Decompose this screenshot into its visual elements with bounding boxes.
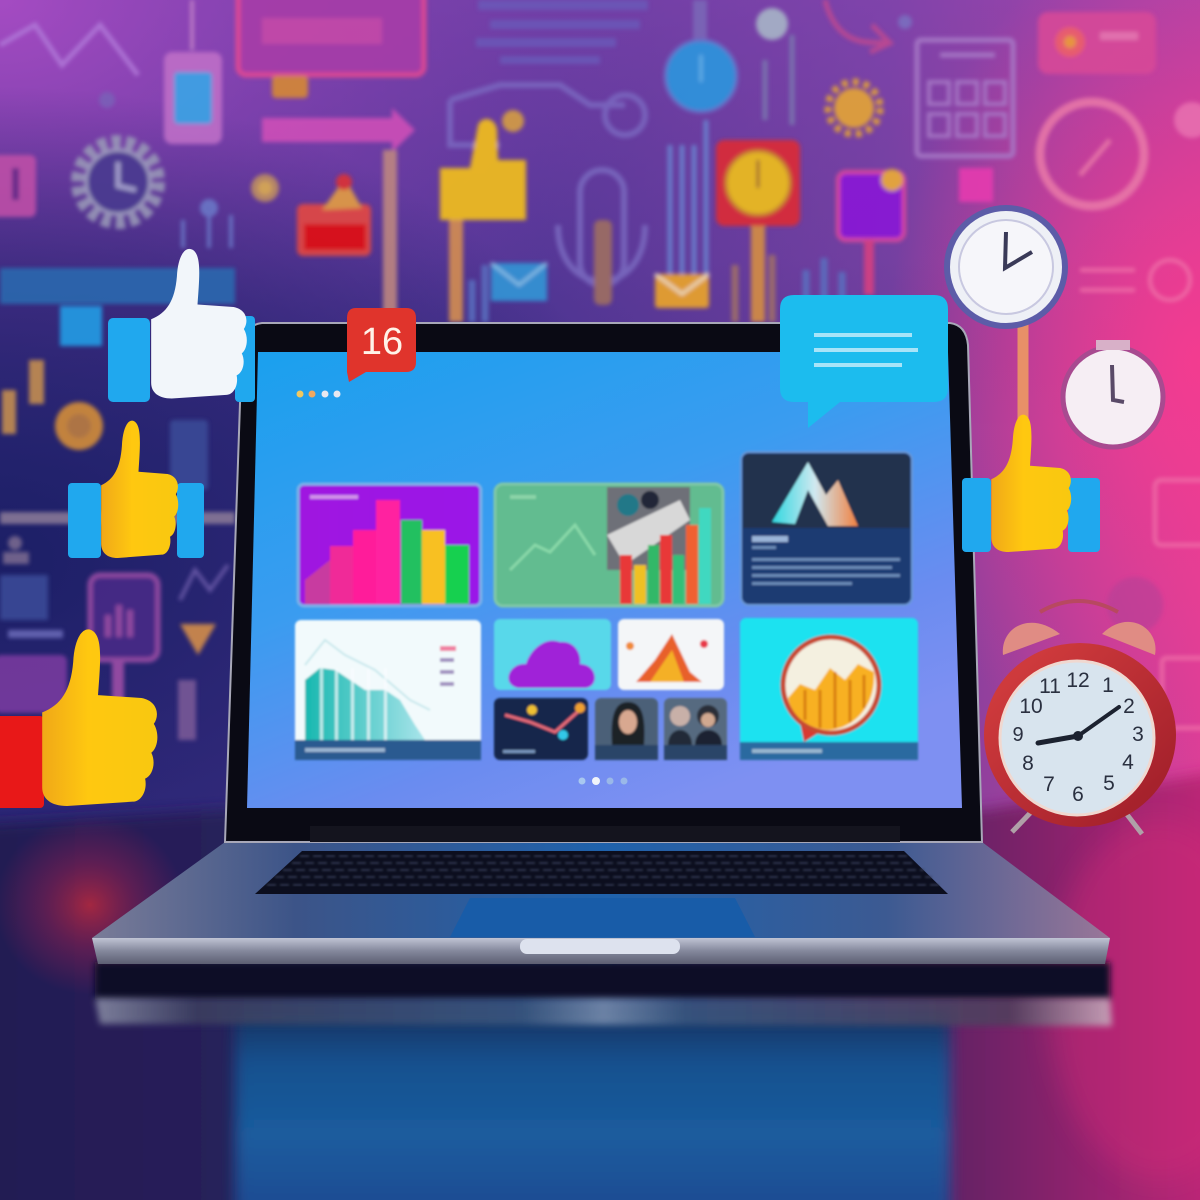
icon: curved arrow (825, 0, 890, 52)
clock numerals: 3 (1132, 723, 1144, 746)
icon: pink square (959, 168, 993, 202)
clock numerals: 8 (1022, 752, 1034, 775)
table surface with reflection (0, 770, 1200, 1200)
notification badge: 16 (361, 321, 403, 363)
alarm clock (984, 601, 1176, 834)
icon: microphone outline (558, 170, 645, 285)
background tech icons (0, 0, 1200, 740)
icon: calendar grid (917, 40, 1013, 156)
keyboard (255, 851, 948, 894)
pagination dots (578, 777, 628, 785)
icon: clipboard chart (90, 575, 158, 705)
icon: circuit block (476, 0, 648, 64)
clock numerals (1012, 669, 1144, 806)
icon: left panel shapes (0, 420, 208, 740)
clock bells (1003, 601, 1156, 655)
icon: red tray (297, 174, 371, 256)
icon: sun gear (828, 82, 880, 134)
clock numerals: 2 (1123, 695, 1135, 718)
clock numerals: 9 (1012, 724, 1024, 746)
thumbs up: gold lower left with red cuff (0, 629, 157, 808)
clock numerals: 5 (1103, 772, 1115, 795)
icon: left pink label (0, 655, 67, 713)
background wall gradient (0, 0, 1200, 860)
laptop (92, 323, 1110, 964)
icon: small dots (99, 92, 279, 202)
thumbs up: gold upper (68, 421, 204, 558)
clock numerals: 7 (1043, 773, 1055, 796)
clock numerals: 10 (1019, 695, 1043, 718)
laptop lid (225, 323, 982, 842)
chat bubble (780, 295, 948, 428)
icon: left small bars (2, 360, 44, 434)
icon: satellite dish (756, 8, 792, 125)
icon: left blue bar (0, 268, 235, 346)
icon: orange dial (55, 402, 103, 450)
screen (247, 352, 962, 808)
wall clock one (947, 208, 1065, 420)
card: two people (664, 698, 727, 760)
icon: faint chart line (180, 565, 228, 600)
icon: mountain logo (772, 462, 858, 526)
thumbs up: white (108, 249, 255, 402)
card: green line chart with photo (495, 484, 723, 606)
icon: left horizontal rail (0, 512, 235, 524)
clock case (984, 643, 1176, 827)
laptop reflection lip (95, 998, 1112, 1026)
notification badge (347, 308, 416, 382)
icon: key circuit (450, 85, 645, 145)
card: mountain chart (618, 619, 724, 690)
icon: right faint panels (1080, 260, 1200, 728)
icon: vertical lines (670, 120, 706, 275)
icon: pink monitor (238, 0, 424, 98)
icon: phone tag (164, 0, 222, 144)
clock numerals: 12 (1066, 669, 1090, 692)
icon: zigzag line (0, 25, 138, 75)
card: portrait (595, 698, 658, 760)
icon: stem line (383, 150, 397, 322)
clock numerals: 6 (1072, 783, 1084, 806)
icon: keyhole tag (0, 155, 36, 217)
card: route map (494, 698, 588, 760)
icon: top right card (1038, 12, 1156, 74)
icon: gear clock (78, 142, 158, 222)
thumbs up: gold right (962, 415, 1100, 552)
trackpad (450, 898, 755, 937)
icon: orange triangle (180, 624, 216, 655)
lid notch (520, 939, 680, 954)
icon: purple app square (838, 169, 904, 295)
icon: yellow thumbs up sign (440, 119, 526, 322)
icon: envelopes (491, 263, 709, 308)
hinge (310, 826, 900, 842)
icon: yellow clock sign (716, 140, 800, 322)
card: purple cloud (494, 619, 611, 690)
clock numerals: 1 (1102, 674, 1114, 697)
clock legs (1012, 808, 1142, 834)
icon: large pink dial (1040, 102, 1144, 206)
icon: person (3, 536, 29, 564)
card: dark logo panel (741, 452, 912, 605)
window dots (296, 390, 340, 398)
icon: chart bubble (783, 637, 879, 742)
wall clock two (1063, 340, 1163, 447)
icon: pink arrow (262, 108, 415, 152)
icon: blue dial pendant (665, 0, 737, 112)
card: purple bar chart (298, 484, 481, 606)
clock numerals: 11 (1039, 675, 1061, 698)
card: white teal chart (295, 620, 481, 760)
card: cyan circular chart (740, 618, 918, 760)
clock face (1000, 661, 1154, 815)
clock hands (1038, 707, 1119, 743)
icon: sliders (183, 201, 231, 248)
laptop base deck (92, 842, 1110, 938)
front lip (92, 938, 1110, 964)
clock numerals: 4 (1122, 751, 1134, 774)
icon: small chart lines (472, 255, 842, 322)
